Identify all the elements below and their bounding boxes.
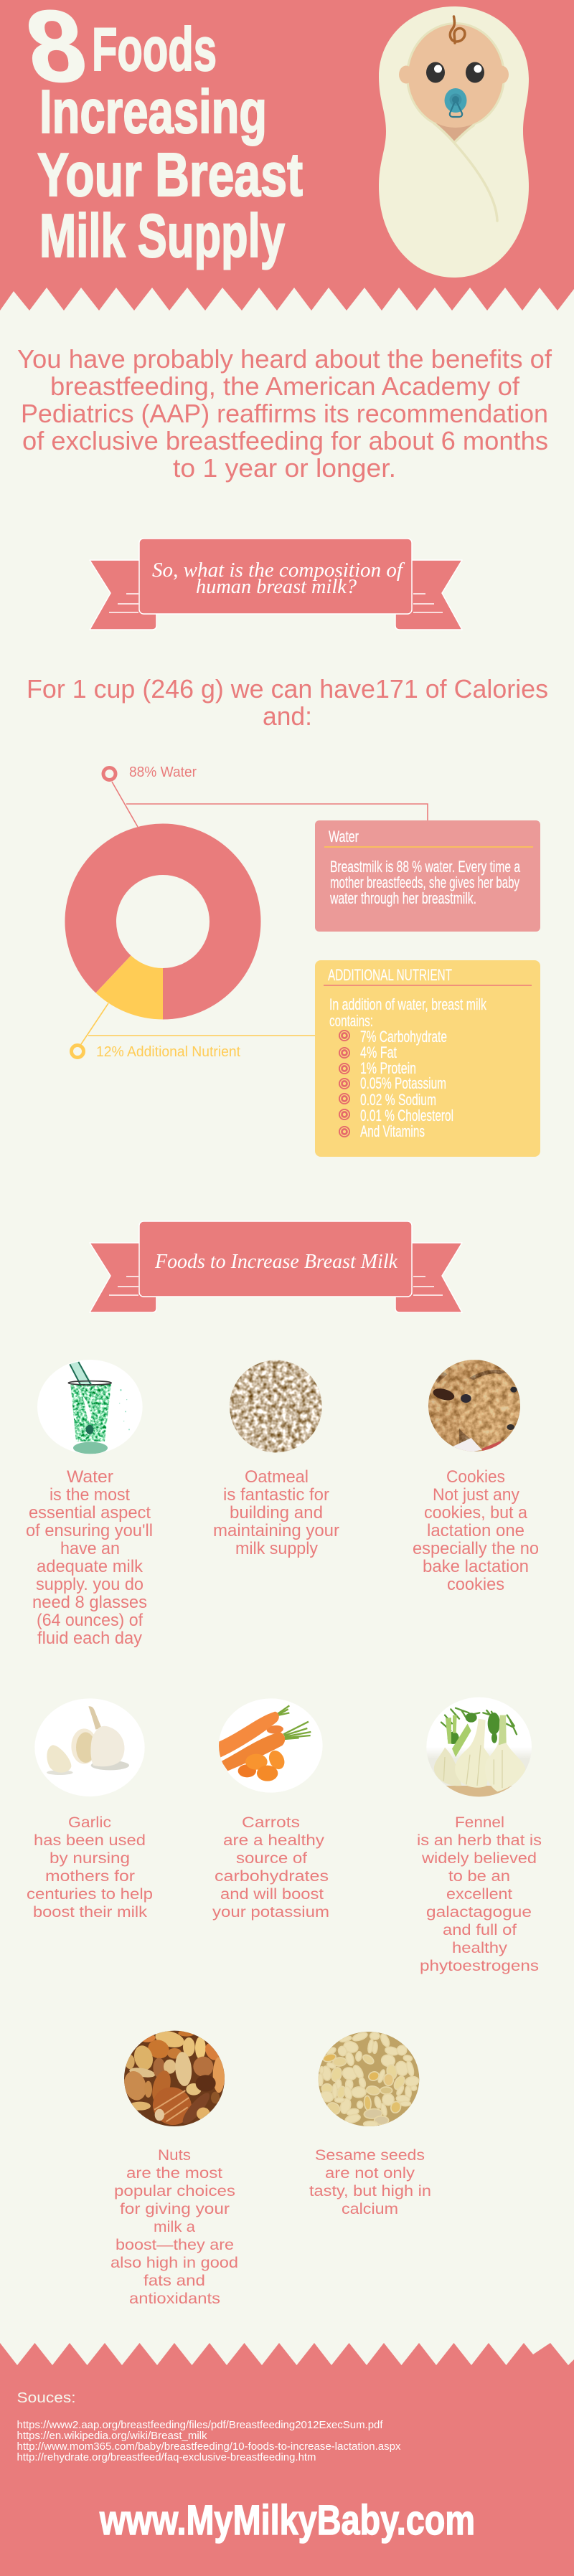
text: fennel [417,1814,542,1974]
text: oatmeal: building and [230,1503,323,1523]
text: carrots: source of [236,1850,307,1867]
text: oatmeal [213,1467,339,1558]
text: carrots: and will boost [220,1886,324,1903]
intro text block: You have probably heard about the benefits of [17,344,552,374]
text: cookies: cookies [447,1575,504,1594]
title: Foods [92,16,217,84]
panel: additional nutrient [315,960,540,1157]
text: sesame seeds: Sesame seeds [315,2147,425,2164]
text: nuts: for giving your [120,2201,230,2217]
text: water: adequate milk [37,1557,144,1576]
text: carrots: Carrots [242,1814,300,1831]
text: fennel: healthy [452,1940,508,1956]
text: carrots: carbohydrates [215,1868,329,1885]
text: nuts: milk a [154,2219,195,2235]
text: oatmeal: is fantastic for [223,1485,329,1505]
icon: swaddled baby [379,6,529,278]
footer website: www.MyMilkyBaby.com [99,2497,475,2544]
text: water [26,1467,153,1648]
text: cookies: lactation one [427,1521,524,1540]
text: garlic: Garlic [68,1814,111,1831]
text: fennel: widely believed [421,1850,537,1867]
text: garlic: centuries to help [27,1886,153,1903]
panel: additional nutrient: 4% Fat [360,1043,397,1061]
food: oatmeal image [228,1359,324,1454]
panel: additional nutrient: contains: [329,1012,373,1030]
callout marker: 12% additional nutrient: 12% Additional Nutrient [96,1044,240,1060]
calories text: For 1 cup (246 g) we can have171 of Calories [27,674,548,704]
text: sesame seeds: calcium [342,2201,398,2217]
intro text block: of exclusive breastfeeding for about 6 months [22,426,548,455]
text: nuts: boost—they are [116,2237,234,2253]
sources list: http://rehydrate.org/breastfeed/faq-exclusive-breastfeeding.htm [17,2452,316,2463]
text: garlic: mothers for [45,1868,135,1885]
text: cookies: bake lactation [423,1557,529,1576]
text: water: have an [60,1539,120,1558]
text: cookies: Not just any [433,1485,519,1505]
text: water: Water [67,1467,113,1487]
panel: additional nutrient: 7% Carbohydrate [360,1028,447,1046]
panel: additional nutrient: 0.05% Potassium [360,1074,446,1092]
panel: additional nutrient: 0.01 % Cholesterol [360,1107,453,1124]
banner: composition question [90,539,462,630]
panel: additional nutrient: ADDITIONAL NUTRIENT [328,966,452,984]
panel: additional nutrient: And Vitamins [360,1122,425,1140]
donut chart: breast milk composition [65,823,261,1020]
text: fennel: phytoestrogens [420,1958,539,1974]
text: water: (64 ounces) of [37,1611,143,1630]
calories text [27,674,548,731]
sources list: https://www2.aap.org/breastfeeding/files/pdf/Breastfeeding2012ExecSum.pdf [17,2420,383,2431]
text: cookies: especially the no [413,1539,539,1558]
food: sesame seeds image [318,2031,420,2127]
text: nuts: antioxidants [129,2291,220,2307]
food: garlic image [34,1698,145,1796]
text: nuts [110,2147,238,2307]
text: sesame seeds: tasty, but high in [309,2183,431,2199]
text: fennel: to be an [448,1868,510,1885]
text: water: essential aspect [29,1503,151,1523]
food: nuts image [124,2031,225,2126]
header band [0,0,574,316]
text: water: of ensuring you'll [26,1521,153,1540]
text: nuts: fats and [144,2273,205,2289]
text: garlic: boost their milk [33,1904,148,1921]
title: Your Breast [37,141,303,209]
text: fennel: Fennel [455,1814,504,1831]
intro text block [17,344,552,483]
callout marker: 88% water [103,764,428,827]
text: water: supply. you do [36,1575,144,1594]
panel: water: Water [329,828,359,846]
text: oatmeal: milk supply [235,1539,318,1558]
text: oatmeal: maintaining your [213,1521,339,1540]
text: nuts: are the most [126,2165,222,2182]
title: Milk Supply [39,202,285,270]
sources list: http://www.mom365.com/baby/breastfeeding/10-foods-to-increase-lactation.aspx [17,2441,401,2453]
intro text block: Pediatrics (AAP) reaffirms its recommendation [21,399,548,428]
text: nuts: popular choices [114,2183,235,2199]
text: carrots: are a healthy [223,1832,325,1849]
text: carrots [212,1814,329,1921]
food: fennel image [425,1697,535,1800]
food: water image [37,1360,143,1454]
panel: additional nutrient: 1% Protein [360,1059,416,1077]
text: nuts: Nuts [158,2147,191,2164]
title [19,0,303,270]
text: cookies [413,1467,539,1594]
text: fennel: galactagogue [426,1904,532,1921]
text: garlic: has been used [34,1832,146,1849]
panel: additional nutrient: In addition of water, breast milk [329,995,487,1013]
text: cookies: Cookies [446,1467,505,1487]
text: garlic [27,1814,153,1921]
intro text block: breastfeeding, the American Academy of [50,371,520,401]
banner: foods to increase breast milk [90,1221,462,1312]
footer band [0,2343,574,2576]
text: oatmeal: Oatmeal [245,1467,309,1487]
banner: foods to increase breast milk: Foods to Increase Breast Milk [154,1251,398,1273]
panel: water: water through her breastmilk. [329,889,476,907]
callout marker: 12% additional nutrient [72,1003,315,1060]
text: nuts: also high in good [110,2255,238,2271]
calories text: and: [263,701,312,731]
text: water: is the most [50,1485,130,1505]
text: carrots: your potassium [212,1904,329,1921]
text: cookies: cookies, but a [424,1503,528,1523]
sources list: Souces: [17,2390,76,2406]
text: water: need 8 glasses [32,1593,147,1612]
sources list: https://en.wikipedia.org/wiki/Breast_milk [17,2430,207,2442]
text: fennel: excellent [446,1886,512,1903]
panel: water [315,820,540,932]
food: carrots image [217,1698,323,1793]
text: water: fluid each day [37,1629,142,1648]
banner: composition question: So, what is the composition of [152,559,405,582]
title: Increasing [39,78,267,146]
banner: composition question: human breast milk? [196,576,357,598]
text: sesame seeds: are not only [325,2165,415,2182]
callout marker: 88% water: 88% Water [129,764,197,780]
text: garlic: by nursing [50,1850,130,1867]
intro text block: to 1 year or longer. [173,453,396,483]
text: fennel: is an herb that is [417,1832,542,1849]
sources list [17,2390,401,2463]
panel: additional nutrient: 0.02 % Sodium [360,1091,436,1109]
food: cookies image [428,1360,520,1452]
text: sesame seeds [309,2147,431,2217]
text: fennel: and full of [443,1922,517,1938]
